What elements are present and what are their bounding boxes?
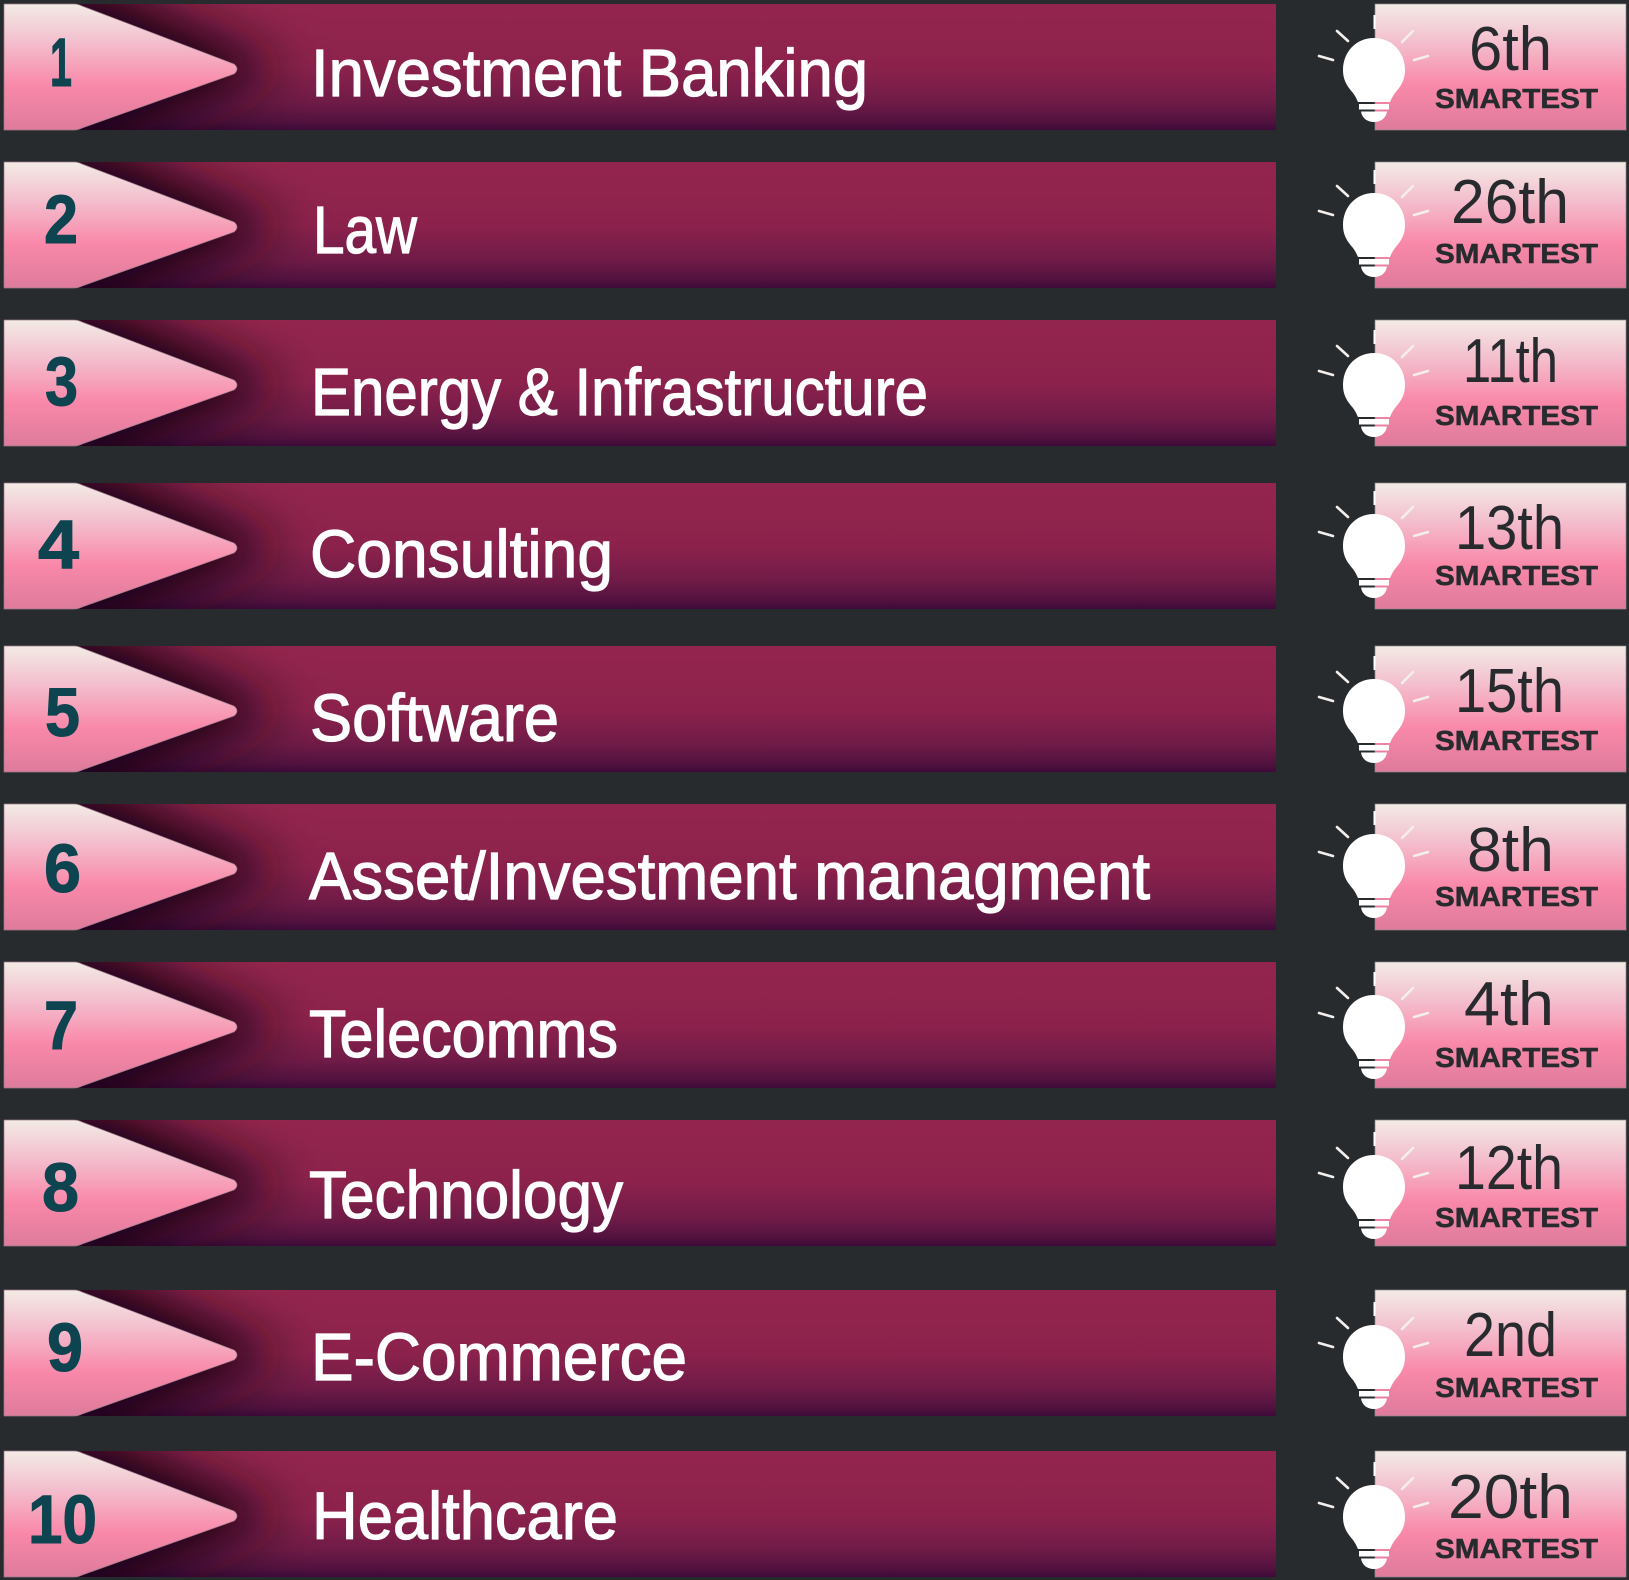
rank number: 8 (42, 1149, 79, 1226)
rank number: 9 (47, 1309, 83, 1386)
smartest label: SMARTEST (1435, 560, 1598, 591)
arrow tag (4, 483, 237, 609)
smartest label: SMARTEST (1435, 83, 1598, 114)
row 6: Asset/Investment managment (0, 784, 1626, 950)
bar (0, 784, 1276, 950)
rank number: 7 (44, 987, 78, 1064)
arrow tag (4, 1120, 237, 1246)
row 10: Healthcare (0, 1431, 1626, 1580)
row 4: Consulting (0, 463, 1626, 629)
icon: light bulb (1319, 1132, 1428, 1239)
arrow tag (4, 162, 237, 288)
bar (0, 942, 1276, 1108)
industry name: Technology (309, 1158, 623, 1233)
industry name: Energy & Infrastructure (311, 355, 928, 430)
row 9: E-Commerce (0, 1270, 1626, 1436)
row 2: Law (0, 142, 1626, 308)
badge (1375, 162, 1626, 288)
smartest label: SMARTEST (1435, 1202, 1598, 1233)
badge (1375, 804, 1626, 930)
arrow tag (4, 1451, 237, 1577)
arrow tag (4, 320, 237, 446)
smartness ordinal: 6th (1469, 15, 1552, 84)
badge (1375, 1120, 1626, 1246)
smartest label: SMARTEST (1435, 725, 1598, 756)
icon: light bulb (1319, 330, 1428, 437)
bar (0, 1431, 1276, 1580)
icon: light bulb (1319, 15, 1428, 122)
badge (1375, 646, 1626, 772)
smartness ordinal: 20th (1448, 1463, 1573, 1532)
icon: light bulb (1319, 972, 1428, 1079)
smartness ordinal: 4th (1464, 970, 1554, 1039)
rank number: 2 (44, 181, 78, 258)
arrow tag (4, 804, 237, 930)
badge (1375, 4, 1626, 130)
arrow tag (4, 962, 237, 1088)
icon: light bulb (1319, 656, 1428, 763)
industry name: Telecomms (309, 997, 618, 1072)
icon: light bulb (1319, 491, 1428, 598)
badge (1375, 320, 1626, 446)
arrow tag (4, 646, 237, 772)
rank number: 4 (38, 506, 79, 583)
rank number: 5 (45, 674, 80, 751)
industry name: Healthcare (312, 1479, 618, 1554)
smartness ordinal: 11th (1463, 327, 1558, 396)
smartness ordinal: 12th (1455, 1134, 1563, 1203)
smartest label: SMARTEST (1435, 400, 1598, 431)
industry name: Law (313, 193, 418, 268)
smartness ordinal: 2nd (1464, 1301, 1557, 1370)
bar (0, 1100, 1276, 1266)
icon: light bulb (1319, 811, 1428, 918)
smartest label: SMARTEST (1435, 1042, 1598, 1073)
icon: light bulb (1319, 1462, 1428, 1569)
smartest label: SMARTEST (1435, 1372, 1598, 1403)
smartest label: SMARTEST (1435, 1533, 1598, 1564)
industry name: Software (310, 681, 559, 756)
row 7: Telecomms (0, 942, 1626, 1108)
smartest label: SMARTEST (1435, 238, 1598, 269)
icon: light bulb (1319, 1302, 1428, 1409)
row 8: Technology (0, 1100, 1626, 1266)
smartness ordinal: 15th (1455, 657, 1564, 726)
rank number: 10 (28, 1481, 97, 1558)
bar (0, 463, 1276, 629)
bar (0, 142, 1276, 308)
arrow tag (4, 1290, 237, 1416)
rank number: 3 (45, 343, 78, 420)
smartness ordinal: 13th (1455, 494, 1564, 563)
icon: light bulb (1319, 170, 1428, 277)
row 3: Energy & Infrastructure (0, 300, 1626, 466)
bar (0, 0, 1276, 150)
industry name: E-Commerce (311, 1320, 687, 1395)
rank number: 1 (50, 24, 72, 101)
industry name: Investment Banking (311, 36, 868, 111)
badge (1375, 962, 1626, 1088)
industry name: Consulting (310, 517, 613, 592)
bar (0, 626, 1276, 792)
badge (1375, 1451, 1626, 1577)
bar (0, 1270, 1276, 1436)
badge (1375, 1290, 1626, 1416)
smartest label: SMARTEST (1435, 881, 1598, 912)
smartness ordinal: 8th (1467, 816, 1554, 885)
row 1: Investment Banking (0, 0, 1626, 150)
row 5: Software (0, 626, 1626, 792)
arrow tag (4, 4, 237, 130)
bar (0, 300, 1276, 466)
smartness ordinal: 26th (1451, 168, 1569, 237)
badge (1375, 483, 1626, 609)
rank number: 6 (44, 830, 81, 907)
industry name: Asset/Investment managment (309, 839, 1150, 914)
